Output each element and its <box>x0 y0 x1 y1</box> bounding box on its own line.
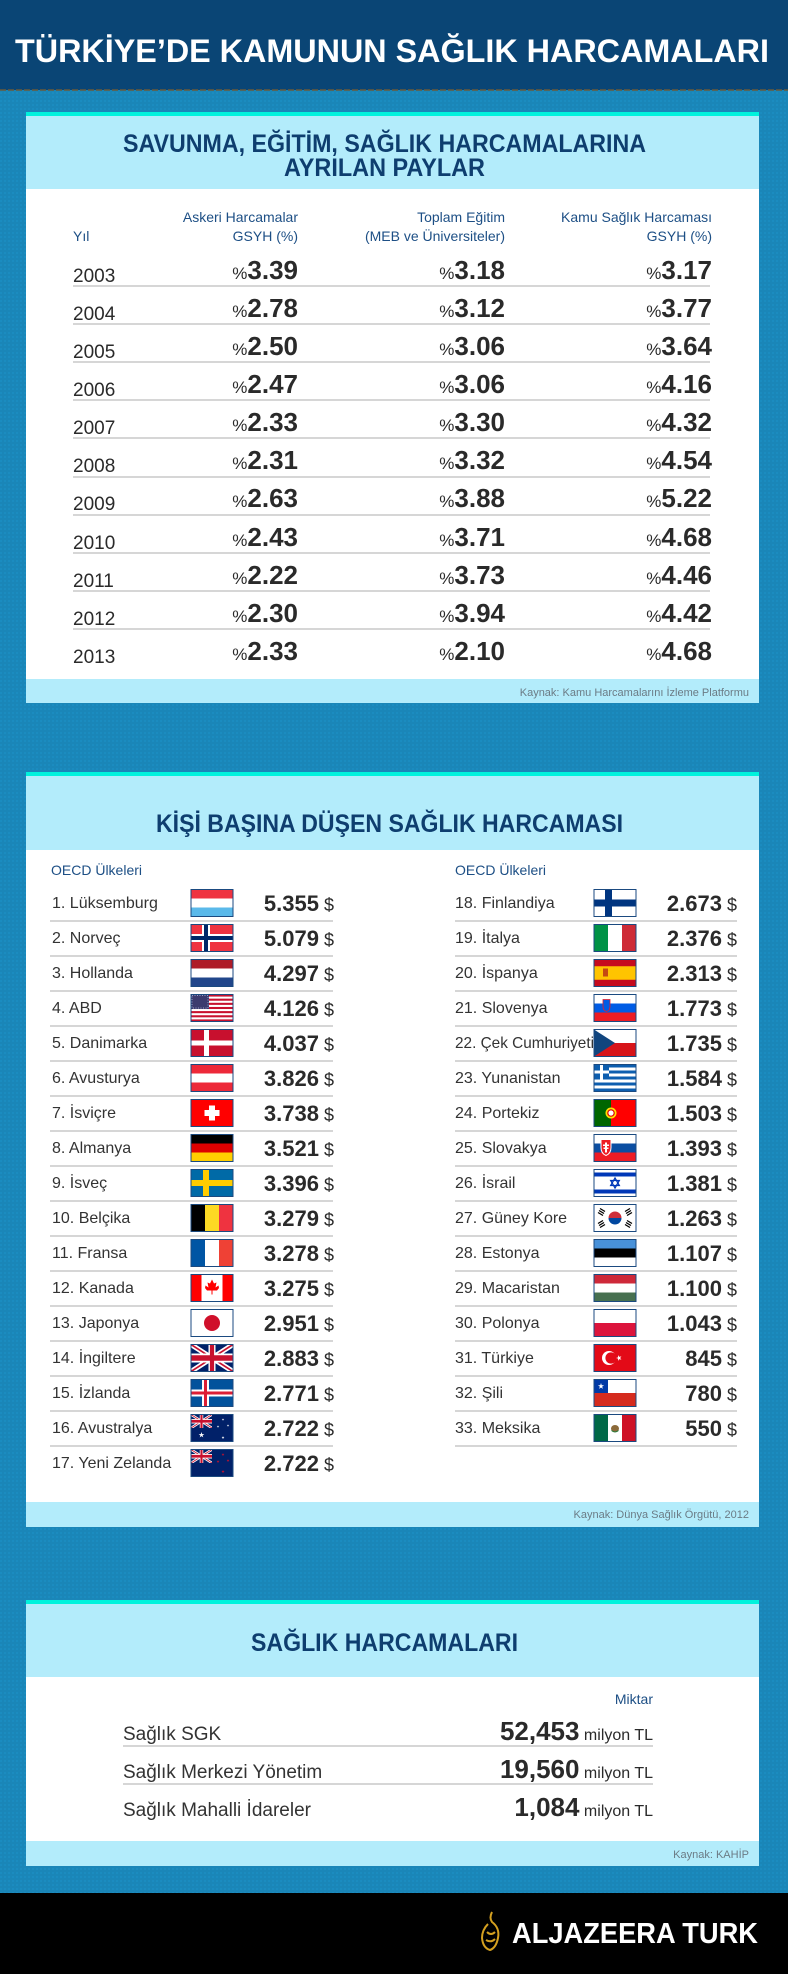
title: TÜRKİYE’DE KAMUNUN SAĞLIK HARCAMALARI <box>15 33 769 69</box>
column headers <box>73 209 712 244</box>
list: ranks 1-17: 4.297 $ <box>264 961 334 986</box>
data table: 2009 <box>73 494 115 515</box>
list: ranks 18-33: 2.313 $ <box>667 961 737 986</box>
list: ranks 1-17: 6. Avusturya <box>52 1070 140 1087</box>
data table: %3.77 <box>646 293 712 323</box>
list: ranks 1-17: 3.278 $ <box>264 1241 334 1266</box>
list: ranks 1-17: 5. Danimarka <box>52 1035 147 1052</box>
data table: 2013 <box>73 647 115 668</box>
data table: %3.06 <box>439 331 505 361</box>
data table: %3.71 <box>439 522 505 552</box>
list: ranks 1-17: 14. İngiltere <box>52 1348 136 1367</box>
list: ranks 18-33: 1.773 $ <box>667 996 737 1021</box>
data table: %2.31 <box>232 445 298 475</box>
data table: %2.22 <box>232 560 298 590</box>
list: ranks 1-17: 2.883 $ <box>264 1346 334 1371</box>
data table: %4.68 <box>646 522 712 552</box>
list: ranks 18-33: 27. Güney Kore <box>455 1210 567 1227</box>
data table: 2006 <box>73 380 115 401</box>
column headers: GSYH (%) <box>233 228 298 244</box>
list: ranks 18-33: 20. İspanya <box>455 963 538 982</box>
list: ranks 18-33: 32. Şili <box>455 1385 503 1402</box>
panel heading: KİŞİ BAŞINA DÜŞEN SAĞLIK HARCAMASI <box>156 809 623 838</box>
header bar <box>0 0 788 90</box>
data table: 2012 <box>73 609 115 630</box>
list: ranks 1-17: 3.275 $ <box>264 1276 334 1301</box>
list: ranks 1-17: 3.279 $ <box>264 1206 334 1231</box>
list: ranks 1-17: 4. ABD <box>52 1000 102 1017</box>
data table: %4.46 <box>646 560 712 590</box>
data table: %3.88 <box>439 483 505 513</box>
list: ranks 1-17: 3.826 $ <box>264 1066 334 1091</box>
list: ranks 1-17: 13. Japonya <box>52 1315 139 1332</box>
data table: %3.18 <box>439 255 505 285</box>
source note: Kaynak: KAHİP <box>673 1848 749 1861</box>
list: ranks 18-33: 1.735 $ <box>667 1031 737 1056</box>
amounts table: Sağlık SGK <box>123 1724 222 1745</box>
list: ranks 18-33: 1.381 $ <box>667 1171 737 1196</box>
list: ranks 18-33: 30. Polonya <box>455 1315 540 1332</box>
list: ranks 1-17: 5.355 $ <box>264 891 334 916</box>
data table: 2008 <box>73 456 115 477</box>
list: ranks 18-33: 1.107 $ <box>667 1241 737 1266</box>
list: ranks 18-33: 845 $ <box>685 1346 737 1371</box>
list: ranks 1-17: 7. İsviçre <box>52 1103 116 1122</box>
list: ranks 1-17: 1. Lüksemburg <box>52 895 158 912</box>
list: ranks 18-33: 28. Estonya <box>455 1245 540 1262</box>
list: ranks 1-17: 2.722 $ <box>264 1416 334 1441</box>
data table: %3.30 <box>439 407 505 437</box>
list: ranks 18-33: 1.503 $ <box>667 1101 737 1126</box>
data table: %2.78 <box>232 293 298 323</box>
amounts table: Miktar <box>615 1691 653 1707</box>
data table: %5.22 <box>646 483 712 513</box>
list: ranks 1-17: OECD Ülkeleri <box>51 861 142 878</box>
data table: %3.06 <box>439 369 505 399</box>
list: ranks 1-17: 3.738 $ <box>264 1101 334 1126</box>
list: ranks 18-33: 2.673 $ <box>667 891 737 916</box>
data table: %4.32 <box>646 407 712 437</box>
column headers: GSYH (%) <box>647 228 712 244</box>
column headers: (MEB ve Üniversiteler) <box>365 227 505 244</box>
list: ranks 1-17: 15. İzlanda <box>52 1383 130 1402</box>
list: ranks 18-33: 21. Slovenya <box>455 1000 548 1017</box>
data table: 2007 <box>73 418 115 439</box>
amounts table <box>123 1691 653 1822</box>
data table: %4.68 <box>646 636 712 666</box>
data table: %3.12 <box>439 293 505 323</box>
list: ranks 18-33: 1.584 $ <box>667 1066 737 1091</box>
logo text: ALJAZEERA TURK <box>512 1918 758 1950</box>
data table: %2.47 <box>232 369 298 399</box>
amounts table: Sağlık Merkezi Yönetim <box>123 1762 322 1783</box>
column headers: Toplam Eğitim <box>417 209 505 225</box>
list: ranks 18-33: 22. Çek Cumhuriyeti <box>455 1035 594 1052</box>
list: ranks 1-17: 4.126 $ <box>264 996 334 1021</box>
data table: %2.50 <box>232 331 298 361</box>
data table: %3.17 <box>646 255 712 285</box>
list: ranks 1-17 <box>50 861 334 1476</box>
list: ranks 18-33: 25. Slovakya <box>455 1140 547 1157</box>
list: ranks 18-33: 1.043 $ <box>667 1311 737 1336</box>
list: ranks 1-17: 5.079 $ <box>264 926 334 951</box>
panel: health expenditures <box>26 1600 759 1866</box>
list: ranks 18-33 <box>455 861 737 1446</box>
panel heading: SAVUNMA, EĞİTİM, SAĞLIK HARCAMALARINA <box>123 129 646 158</box>
list: ranks 18-33: 23. Yunanistan <box>455 1070 561 1087</box>
column headers: Askeri Harcamalar <box>183 209 298 225</box>
data table: %4.54 <box>646 445 713 475</box>
list: ranks 1-17: 11. Fransa <box>52 1245 127 1262</box>
panel heading: AYRILAN PAYLAR <box>284 154 485 182</box>
list: ranks 1-17: 17. Yeni Zelanda <box>52 1455 171 1472</box>
list: ranks 18-33: 550 $ <box>685 1416 737 1441</box>
list: ranks 1-17: 2.951 $ <box>264 1311 334 1336</box>
list: ranks 1-17: 4.037 $ <box>264 1031 334 1056</box>
data table: 2003 <box>73 266 115 287</box>
data table: %2.10 <box>439 636 505 666</box>
panel heading <box>123 129 646 182</box>
list: ranks 1-17: 3.396 $ <box>264 1171 334 1196</box>
list: ranks 18-33: 24. Portekiz <box>455 1105 539 1122</box>
data table: %4.16 <box>646 369 712 399</box>
data table: %2.33 <box>232 636 298 666</box>
list: ranks 1-17: 3.521 $ <box>264 1136 334 1161</box>
source note: Kaynak: Kamu Harcamalarını İzleme Platformu <box>520 686 749 699</box>
data table: %3.73 <box>439 560 505 590</box>
column headers: Kamu Sağlık Harcaması <box>561 209 712 225</box>
amounts table: Sağlık Mahalli İdareler <box>123 1800 312 1821</box>
data table: %3.94 <box>439 598 506 628</box>
column headers: Yıl <box>73 228 89 244</box>
data table: %2.43 <box>232 522 298 552</box>
data table: 2011 <box>73 571 114 592</box>
list: ranks 18-33: 18. Finlandiya <box>455 895 555 912</box>
list: ranks 1-17: 16. Avustralya <box>52 1420 152 1437</box>
list: ranks 18-33: 19. İtalya <box>455 928 520 947</box>
list: ranks 18-33: OECD Ülkeleri <box>455 861 546 878</box>
list: ranks 18-33: 1.393 $ <box>667 1136 737 1161</box>
list: ranks 18-33: 2.376 $ <box>667 926 737 951</box>
data table: 2005 <box>73 342 115 363</box>
panel: per-capita health spending <box>26 772 759 1527</box>
source note: Kaynak: Dünya Sağlık Örgütü, 2012 <box>574 1509 749 1521</box>
data table <box>73 255 713 668</box>
data table: %3.64 <box>646 331 713 361</box>
list: ranks 18-33: 33. Meksika <box>455 1420 540 1437</box>
list: ranks 18-33: 29. Macaristan <box>455 1280 560 1297</box>
data table: 2004 <box>73 304 116 325</box>
data table: 2010 <box>73 533 115 554</box>
data table: %2.33 <box>232 407 298 437</box>
list: ranks 18-33: 1.100 $ <box>667 1276 737 1301</box>
list: ranks 18-33: 26. İsrail <box>455 1173 515 1192</box>
list: ranks 1-17: 2. Norveç <box>52 930 120 947</box>
list: ranks 1-17: 12. Kanada <box>52 1280 134 1297</box>
list: ranks 1-17: 2.722 $ <box>264 1451 334 1476</box>
panel heading: SAĞLIK HARCAMALARI <box>251 1628 518 1657</box>
amounts table: 19,560 milyon TL <box>500 1754 653 1784</box>
panel: defence, education, health shares <box>26 112 759 703</box>
list: ranks 1-17: 10. Belçika <box>52 1210 130 1227</box>
list: ranks 18-33: 1.263 $ <box>667 1206 737 1231</box>
list: ranks 18-33: 780 $ <box>685 1381 737 1406</box>
data table: %2.30 <box>232 598 298 628</box>
list: ranks 1-17: 3. Hollanda <box>52 965 133 982</box>
data table: %3.32 <box>439 445 505 475</box>
amounts table: 52,453 milyon TL <box>500 1716 653 1746</box>
amounts table: 1,084 milyon TL <box>514 1792 653 1822</box>
list: ranks 1-17: 9. İsveç <box>52 1173 107 1192</box>
icon: aljazeera logo mark <box>482 1912 498 1950</box>
list: ranks 1-17: 2.771 $ <box>264 1381 334 1406</box>
list: ranks 1-17: 8. Almanya <box>52 1140 131 1157</box>
data table: %4.42 <box>646 598 712 628</box>
data table: %2.63 <box>232 483 298 513</box>
footer bar <box>0 1893 788 1974</box>
data table: %3.39 <box>232 255 298 285</box>
list: ranks 18-33: 31. Türkiye <box>455 1350 534 1367</box>
